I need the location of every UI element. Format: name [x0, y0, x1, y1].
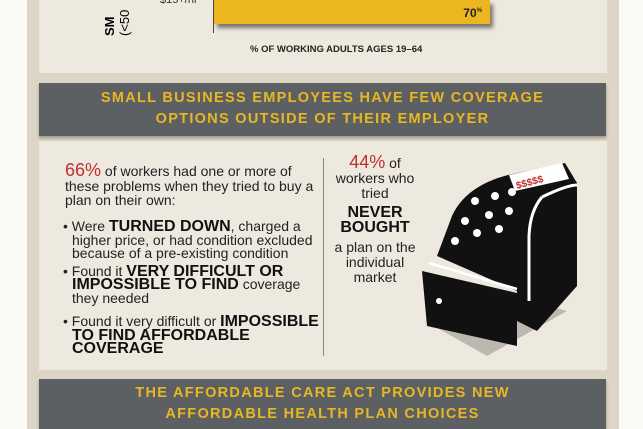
- heading: affordable care act: AFFORDABLE HEALTH PLAN CHOICES: [165, 406, 480, 422]
- heading: small business: [39, 83, 606, 136]
- panel: top chart: [39, 0, 607, 73]
- text block: 66%: 66% of workers had one or more of these problems when they tried to buy a plan on their own:: [65, 160, 313, 208]
- text block: 44%: BOUGHT: [340, 219, 410, 236]
- axis caption: % OF WORKING ADULTS AGES 19–64: [250, 44, 422, 55]
- panel: problems: [39, 141, 607, 370]
- bar 70%: 70%: [463, 6, 482, 20]
- bullet list: • Found it VERY DIFFICULT OR IMPOSSIBLE TO FIND coverage they needed: [63, 262, 300, 306]
- heading: small business: OPTIONS OUTSIDE OF THEIR EMPLOYER: [156, 111, 489, 127]
- bullet list: [63, 218, 319, 357]
- text block: 44%: tried a plan on the individual market: [335, 185, 415, 285]
- bar 70%: [214, 0, 490, 24]
- heading: affordable care act: THE AFFORDABLE CARE ACT PROVIDES NEW: [135, 385, 510, 401]
- bullet list: • Found it very difficult or IMPOSSIBLE TO FIND AFFORDABLE COVERAGE: [63, 313, 319, 357]
- icon: cash register: [422, 163, 577, 356]
- heading: affordable care act: [39, 379, 606, 429]
- heading: small business: SMALL BUSINESS EMPLOYEES HAVE FEW COVERAGE: [101, 90, 544, 106]
- bullet list: • Were TURNED DOWN, charged a higher price, or had condition excluded because of a pre-existing condition: [63, 218, 312, 261]
- text block: 44%: workers who: [336, 170, 414, 186]
- axis label SM: SM (<50: [102, 10, 132, 36]
- text block: 44%: NEVER: [347, 204, 403, 221]
- text block: 44%: 44% of: [349, 152, 401, 172]
- icon: cash register: $$$$$: [515, 174, 545, 192]
